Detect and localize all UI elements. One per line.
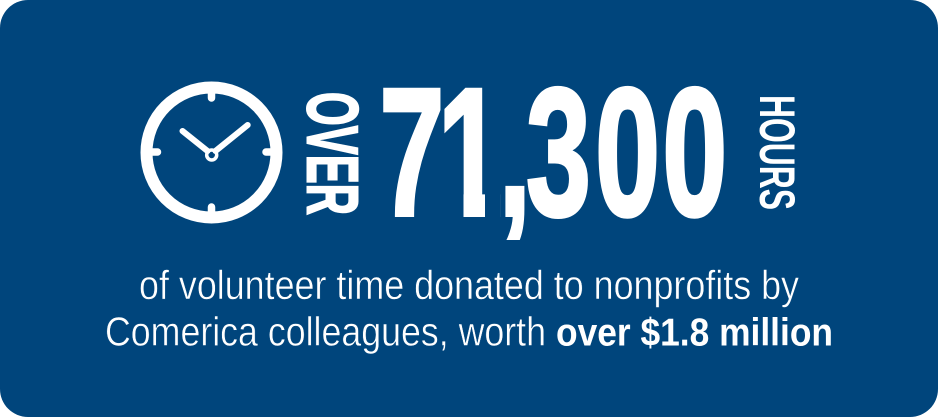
description: second line xyxy=(105,308,833,354)
description: first line: of volunteer time donated to nonprofits by xyxy=(139,262,799,308)
emphasis: over $1.8 million: over $1.8 million xyxy=(556,312,833,354)
icon: clock xyxy=(146,88,276,218)
headline number: 71,300: 71,300 xyxy=(380,52,727,254)
label: OVER (rotated): OVER xyxy=(292,92,372,215)
description: second line: Comerica colleagues, worth xyxy=(105,308,546,354)
label: HOURS (rotated): HOURS xyxy=(749,95,805,210)
